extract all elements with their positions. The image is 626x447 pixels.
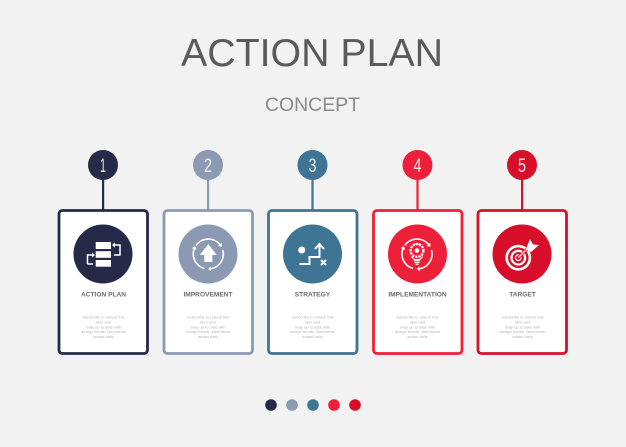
- label: IMPLEMENTATION: [388, 292, 447, 299]
- description: design trends. New items: [81, 329, 126, 334]
- description: Subscribe to unlock this: [82, 314, 125, 320]
- number badge 5: 5: [518, 156, 526, 177]
- number badge 2: 2: [204, 156, 212, 177]
- icon: target with dart: [492, 224, 552, 284]
- connector line: [207, 178, 209, 211]
- number badge 2: [193, 150, 223, 180]
- description: design trends. New items: [186, 329, 230, 334]
- description: design trends. New items: [290, 329, 335, 334]
- number badge 5: [507, 150, 537, 180]
- panel: implementation: [374, 150, 462, 354]
- card frame: [164, 210, 252, 354]
- card frame: [478, 210, 566, 354]
- icon: stacked list with arrows: [74, 224, 132, 284]
- subtitle: CONCEPT: [265, 94, 360, 116]
- description: item and: [410, 319, 425, 324]
- panel: target: [478, 150, 566, 354]
- card frame: [59, 210, 148, 354]
- description: Stay up to date with: [190, 324, 226, 329]
- description: design trends. New items: [500, 329, 545, 334]
- description: item and: [96, 319, 111, 324]
- description: Subscribe to unlock this: [291, 314, 334, 320]
- number badge 4: 4: [414, 156, 422, 177]
- description: added daily: [93, 334, 114, 339]
- panel: improvement: [164, 150, 252, 354]
- description: item and: [305, 319, 320, 324]
- number badge 1: 1: [100, 156, 106, 177]
- description: Subscribe to unlock this: [501, 314, 544, 320]
- card frame: [374, 210, 462, 354]
- number badge 1: [88, 150, 118, 180]
- icon: lightbulb gear in cycle: [388, 224, 447, 284]
- description: Subscribe to unlock this: [187, 314, 229, 320]
- description: added daily: [302, 334, 323, 339]
- description: item and: [200, 319, 216, 324]
- connector line: [311, 178, 314, 211]
- description: added daily: [198, 334, 218, 339]
- pagination dots: [265, 399, 361, 411]
- connector line: [416, 178, 419, 211]
- number badge 4: [402, 150, 432, 180]
- card frame: [268, 210, 357, 354]
- description: Stay up to date with: [295, 324, 330, 329]
- connector line: [102, 178, 104, 211]
- connector line: [521, 178, 523, 211]
- panel: strategy: [268, 150, 357, 354]
- label: STRATEGY: [295, 292, 331, 299]
- number badge 3: 3: [308, 156, 316, 177]
- label: TARGET: [509, 292, 536, 299]
- panel: action plan: [59, 150, 148, 354]
- description: added daily: [407, 334, 428, 339]
- label: IMPROVEMENT: [183, 292, 233, 299]
- description: item and: [515, 319, 530, 324]
- description: design trends. New items: [395, 329, 440, 334]
- description: Stay up to date with: [400, 324, 435, 329]
- description: Subscribe to unlock this: [396, 314, 439, 320]
- number badge 3: [298, 150, 328, 180]
- description: added daily: [512, 334, 533, 339]
- icon: stairs with arrow: [283, 224, 342, 284]
- title: ACTION PLAN: [181, 31, 443, 75]
- description: Stay up to date with: [505, 324, 540, 329]
- icon: up arrow in cycle: [178, 224, 238, 284]
- label: ACTION PLAN: [81, 292, 126, 299]
- description: Stay up to date with: [86, 324, 121, 329]
